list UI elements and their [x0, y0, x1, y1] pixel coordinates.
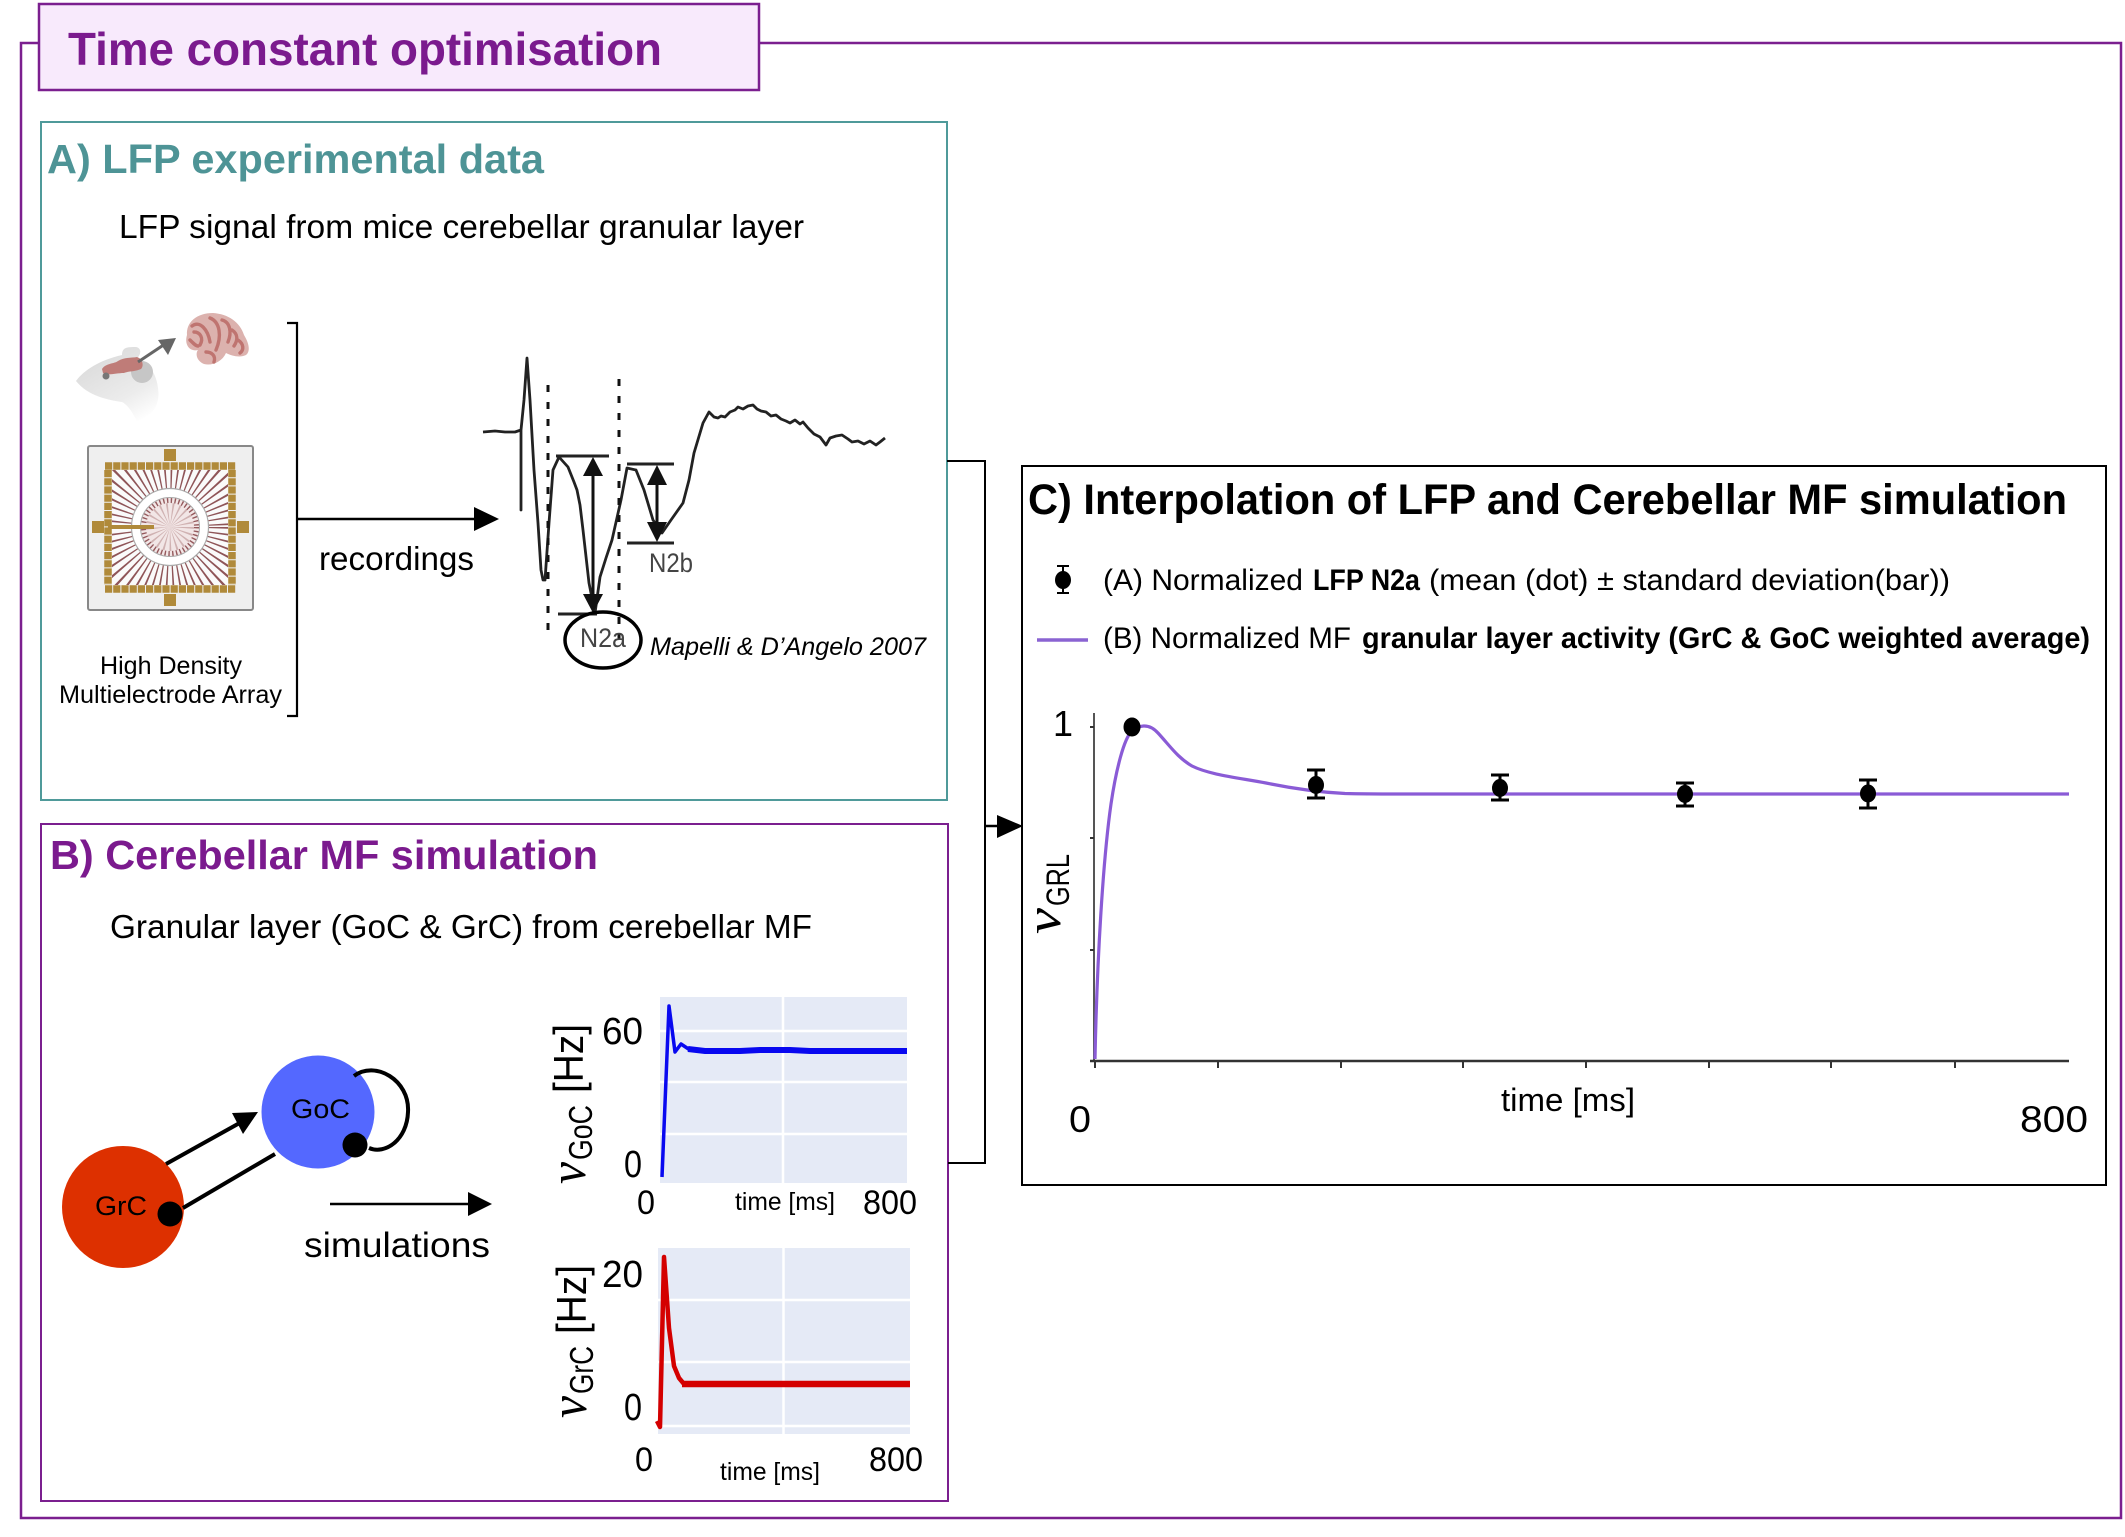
chart: GrC firing rate: [Hz]	[548, 1265, 595, 1334]
legend entry A: (A) Normalized	[1103, 564, 1303, 597]
legend entry B	[1037, 622, 2090, 655]
network diagram GrC GoC	[62, 1056, 408, 1268]
chart: GoC firing rate	[540, 997, 917, 1222]
chart: interpolation curve and data: 800	[2020, 1099, 2088, 1140]
panel C heading: C) Interpolation of LFP and Cerebellar MF simulation	[1028, 476, 2067, 524]
chart: GoC firing rate: GoC	[562, 1105, 599, 1160]
LFP trace chart: N2b	[649, 548, 693, 578]
network diagram GrC GoC: GoC	[291, 1094, 350, 1124]
chart: interpolation curve and data: 1	[1053, 703, 1073, 744]
chart: GrC firing rate: GrC	[563, 1346, 600, 1394]
chart: GrC firing rate: 20	[602, 1254, 643, 1296]
panel B subtitle: Granular layer (GoC & GrC) from cerebellar MF	[110, 908, 812, 945]
chart: GoC firing rate: 0	[637, 1184, 655, 1222]
chart: GoC firing rate: time [ms]	[735, 1188, 835, 1216]
array caption: Multielectrode Array	[59, 681, 282, 709]
chart: interpolation curve and data: ν	[1015, 907, 1071, 934]
chart: interpolation curve and data	[1015, 703, 2088, 1140]
simulations arrow	[330, 1192, 492, 1216]
chart: GoC firing rate: 60	[602, 1011, 643, 1053]
connector arrow from panels A and B to C	[947, 461, 1023, 1163]
title box	[39, 4, 759, 90]
LFP trace chart: N2a	[580, 623, 627, 653]
chart: GrC firing rate: time [ms]	[720, 1458, 820, 1486]
chart: interpolation curve and data: 0	[1069, 1099, 1091, 1140]
legend entry A	[1055, 564, 1950, 597]
legend entry B: (B) Normalized MF	[1103, 622, 1351, 655]
legend entry A: (mean (dot) ± standard deviation(bar))	[1429, 564, 1950, 597]
array caption: High Density	[100, 652, 242, 680]
chart: GrC firing rate: 0	[635, 1441, 653, 1479]
legend entry B: granular layer activity (GrC & GoC weighted average)	[1362, 622, 2090, 655]
panel B: Cerebellar MF simulation	[41, 824, 948, 1501]
citation: Mapelli & D’Angelo 2007	[650, 633, 927, 661]
chart: GrC firing rate: 0	[624, 1387, 642, 1429]
bracket and recordings arrow	[287, 323, 499, 716]
panel A heading: A) LFP experimental data	[47, 136, 545, 182]
panel A subtitle: LFP signal from mice cerebellar granular layer	[119, 208, 804, 245]
chart: GoC firing rate: 0	[624, 1144, 642, 1186]
chart: interpolation curve and data: time [ms]	[1501, 1082, 1635, 1118]
icon: mouse with cerebellum	[76, 313, 249, 421]
title: Time constant optimisation	[68, 23, 662, 75]
icon: high density multielectrode array	[88, 446, 253, 610]
chart: GoC firing rate: [Hz]	[545, 1024, 592, 1093]
simulations label: simulations	[304, 1226, 490, 1265]
chart: GrC firing rate: 800	[869, 1441, 923, 1479]
chart: GoC firing rate: 800	[863, 1184, 917, 1222]
recordings label: recordings	[319, 540, 474, 577]
panel A: LFP experimental data	[41, 122, 947, 800]
legend entry A: LFP N2a	[1313, 564, 1420, 597]
network diagram GrC GoC: GrC	[95, 1191, 147, 1221]
panel C: interpolation	[1015, 466, 2106, 1185]
array caption	[59, 652, 282, 709]
chart: GrC firing rate	[541, 1248, 923, 1486]
chart: GoC firing rate: ν	[540, 1161, 597, 1184]
chart: GrC firing rate: ν	[541, 1395, 598, 1418]
panel B heading: B) Cerebellar MF simulation	[50, 832, 598, 878]
LFP trace chart	[483, 358, 885, 668]
chart: interpolation curve and data: GRL	[1040, 854, 1076, 906]
